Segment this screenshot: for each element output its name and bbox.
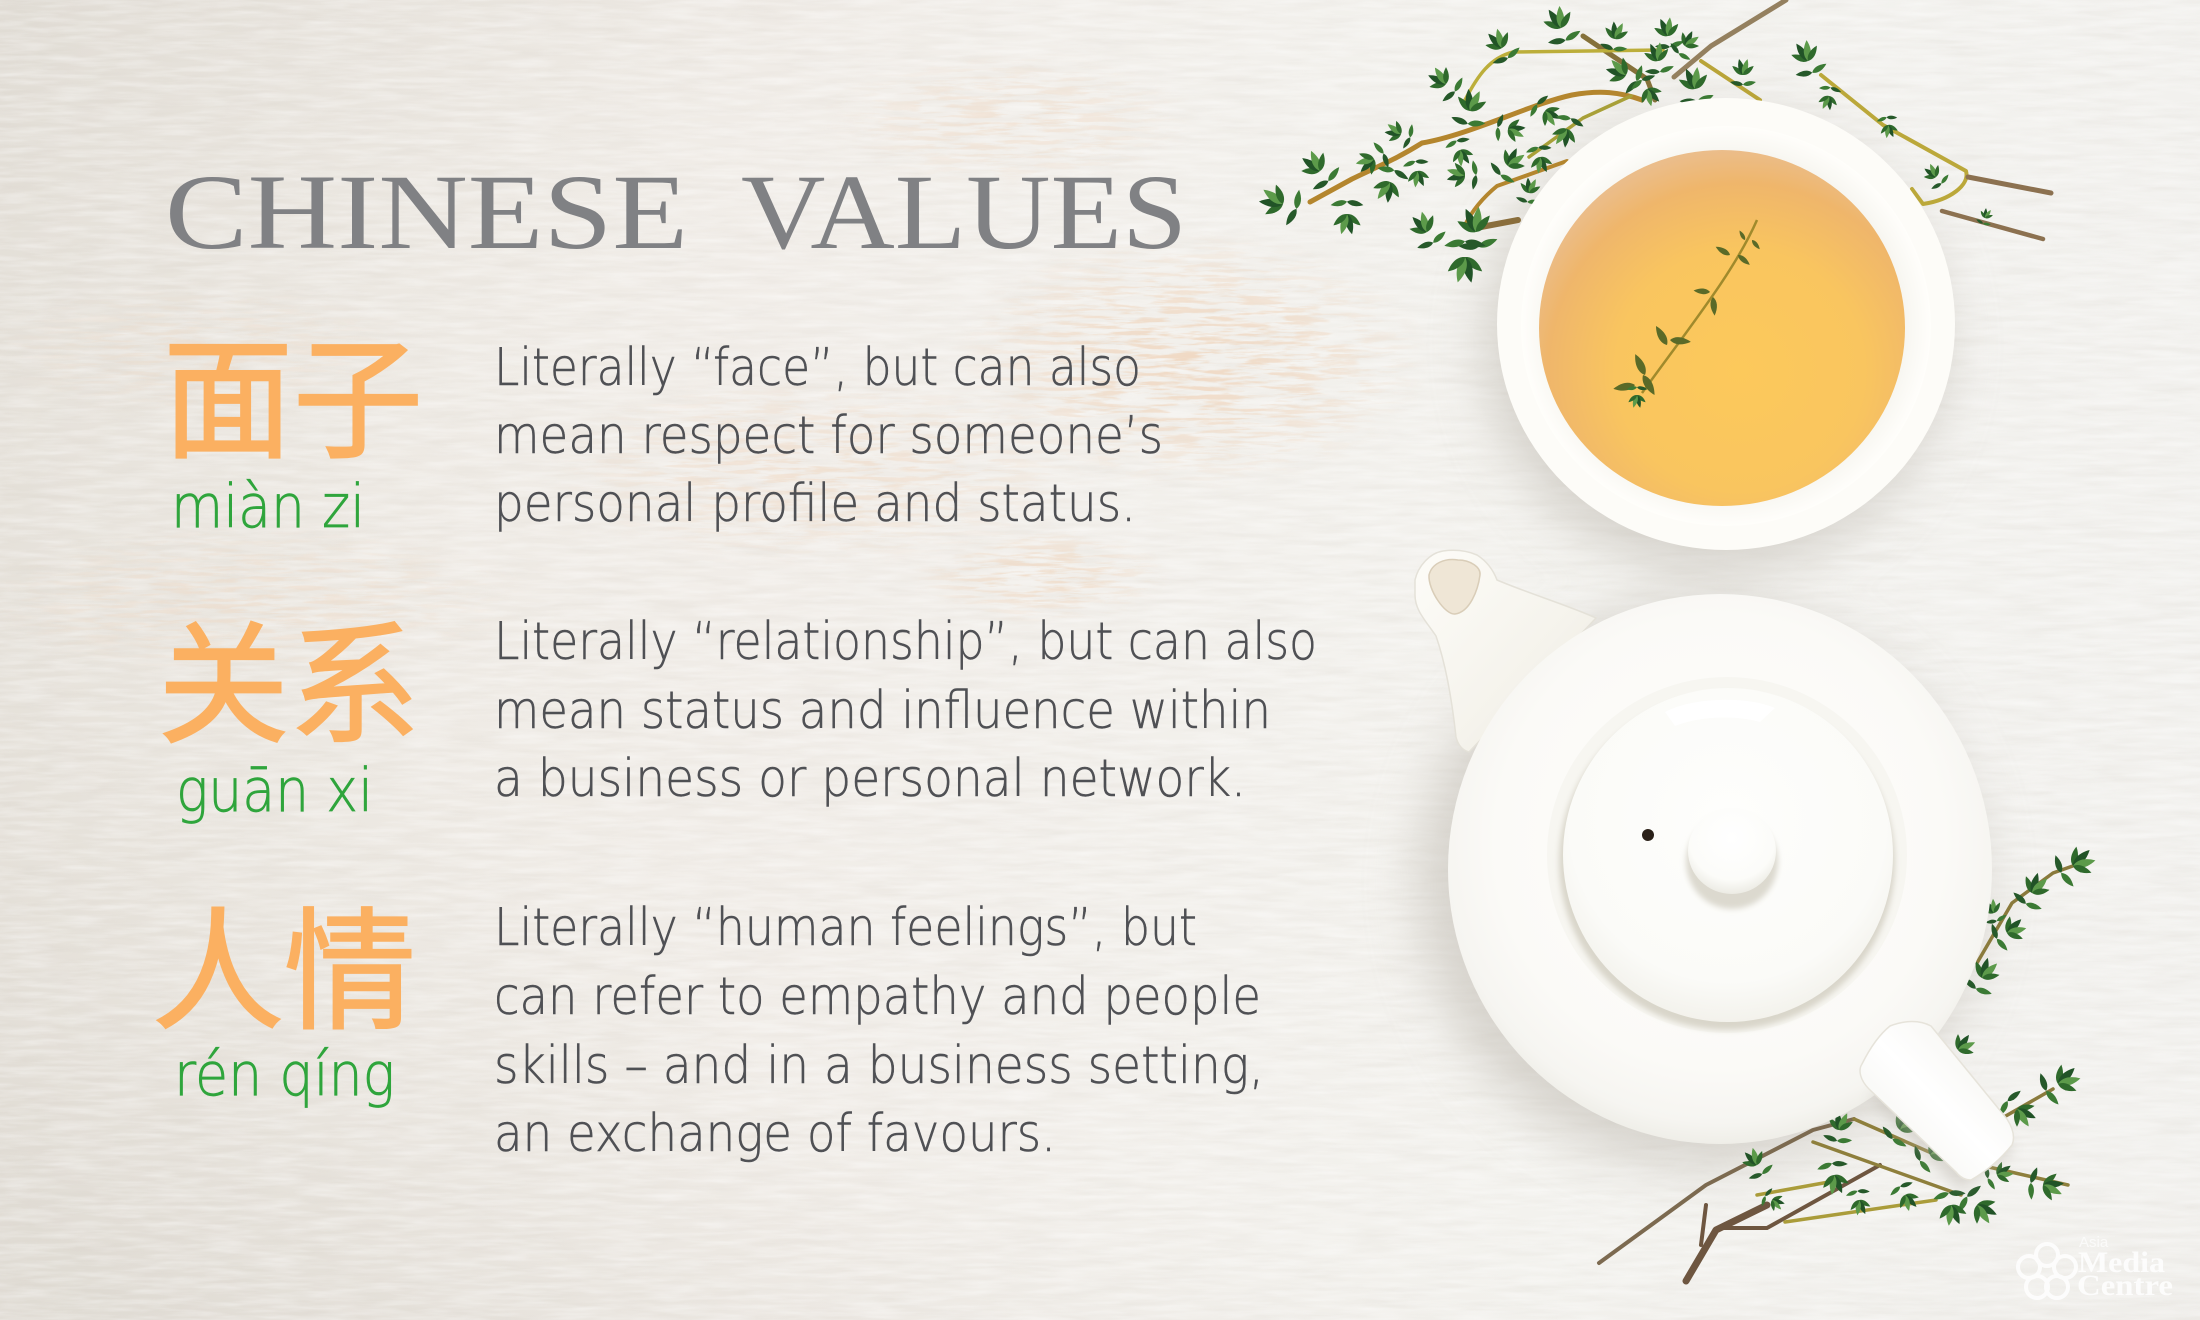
description: guan xi	[494, 612, 1317, 809]
pinyin: ren qing: rén qíng	[174, 1040, 395, 1110]
title	[165, 154, 1187, 272]
tea pot	[1415, 550, 2015, 1190]
description: guan xi: a business or personal network.	[494, 749, 1246, 809]
herb sprig: top	[1253, 0, 2051, 284]
logo wordmark: Centre	[2077, 1269, 2173, 1302]
lid vent hole	[1642, 829, 1654, 841]
logo wordmark	[2077, 1234, 2173, 1302]
description: ren qing: can refer to empathy and people	[494, 967, 1261, 1027]
description: ren qing: an exchange of favours.	[494, 1104, 1056, 1164]
description: ren qing: skills – and in a business setting,	[494, 1036, 1264, 1096]
lid	[1563, 688, 1893, 1022]
hanzi: ren qing: 人情	[152, 899, 416, 1046]
pinyin: guan xi: guān xi	[176, 756, 373, 826]
pinyin: mian zi: miàn zi	[171, 472, 365, 542]
description: guan xi: mean status and influence within	[494, 681, 1271, 741]
tea liquid	[1539, 150, 1905, 506]
description: mian zi: personal profile and status.	[494, 474, 1136, 534]
tea cup	[1497, 98, 1955, 550]
panel: mian zi	[163, 328, 1163, 542]
lid rim	[1547, 677, 1907, 1033]
description: ren qing	[494, 898, 1264, 1164]
logo mark	[2018, 1244, 2076, 1298]
knob shadow	[1686, 815, 1778, 909]
spout opening	[1429, 560, 1480, 614]
lid shadow	[1559, 694, 1895, 1030]
title: VALUES	[741, 154, 1187, 272]
panel: guan xi	[158, 612, 1317, 826]
title: CHINESE	[165, 154, 688, 272]
logo wordmark: Asia	[2079, 1234, 2109, 1251]
description: mian zi: mean respect for someone’s	[494, 406, 1163, 466]
description: mian zi: Literally “face”, but can also	[494, 338, 1141, 398]
handle shadow	[1870, 1060, 2015, 1190]
herb sprigs: bottom	[1599, 838, 2103, 1281]
soft shadows	[1418, 117, 1982, 1167]
teapot body	[1448, 594, 1992, 1144]
sprig floating in tea	[1613, 220, 1761, 408]
description: ren qing: Literally “human feelings”, but	[494, 898, 1197, 958]
handle	[1860, 1022, 2014, 1180]
panel: ren qing	[152, 898, 1264, 1164]
description: mian zi	[494, 338, 1163, 534]
knob	[1688, 808, 1776, 894]
logo wordmark: Media	[2078, 1246, 2165, 1279]
logo: Asia Media Centre	[2018, 1234, 2173, 1302]
lid highlight	[1665, 700, 1775, 726]
spout	[1415, 550, 1596, 752]
hanzi: guan xi: 关系	[158, 613, 420, 760]
hanzi: mian zi: 面子	[163, 328, 423, 475]
description: guan xi: Literally “relationship”, but can also	[494, 612, 1317, 672]
